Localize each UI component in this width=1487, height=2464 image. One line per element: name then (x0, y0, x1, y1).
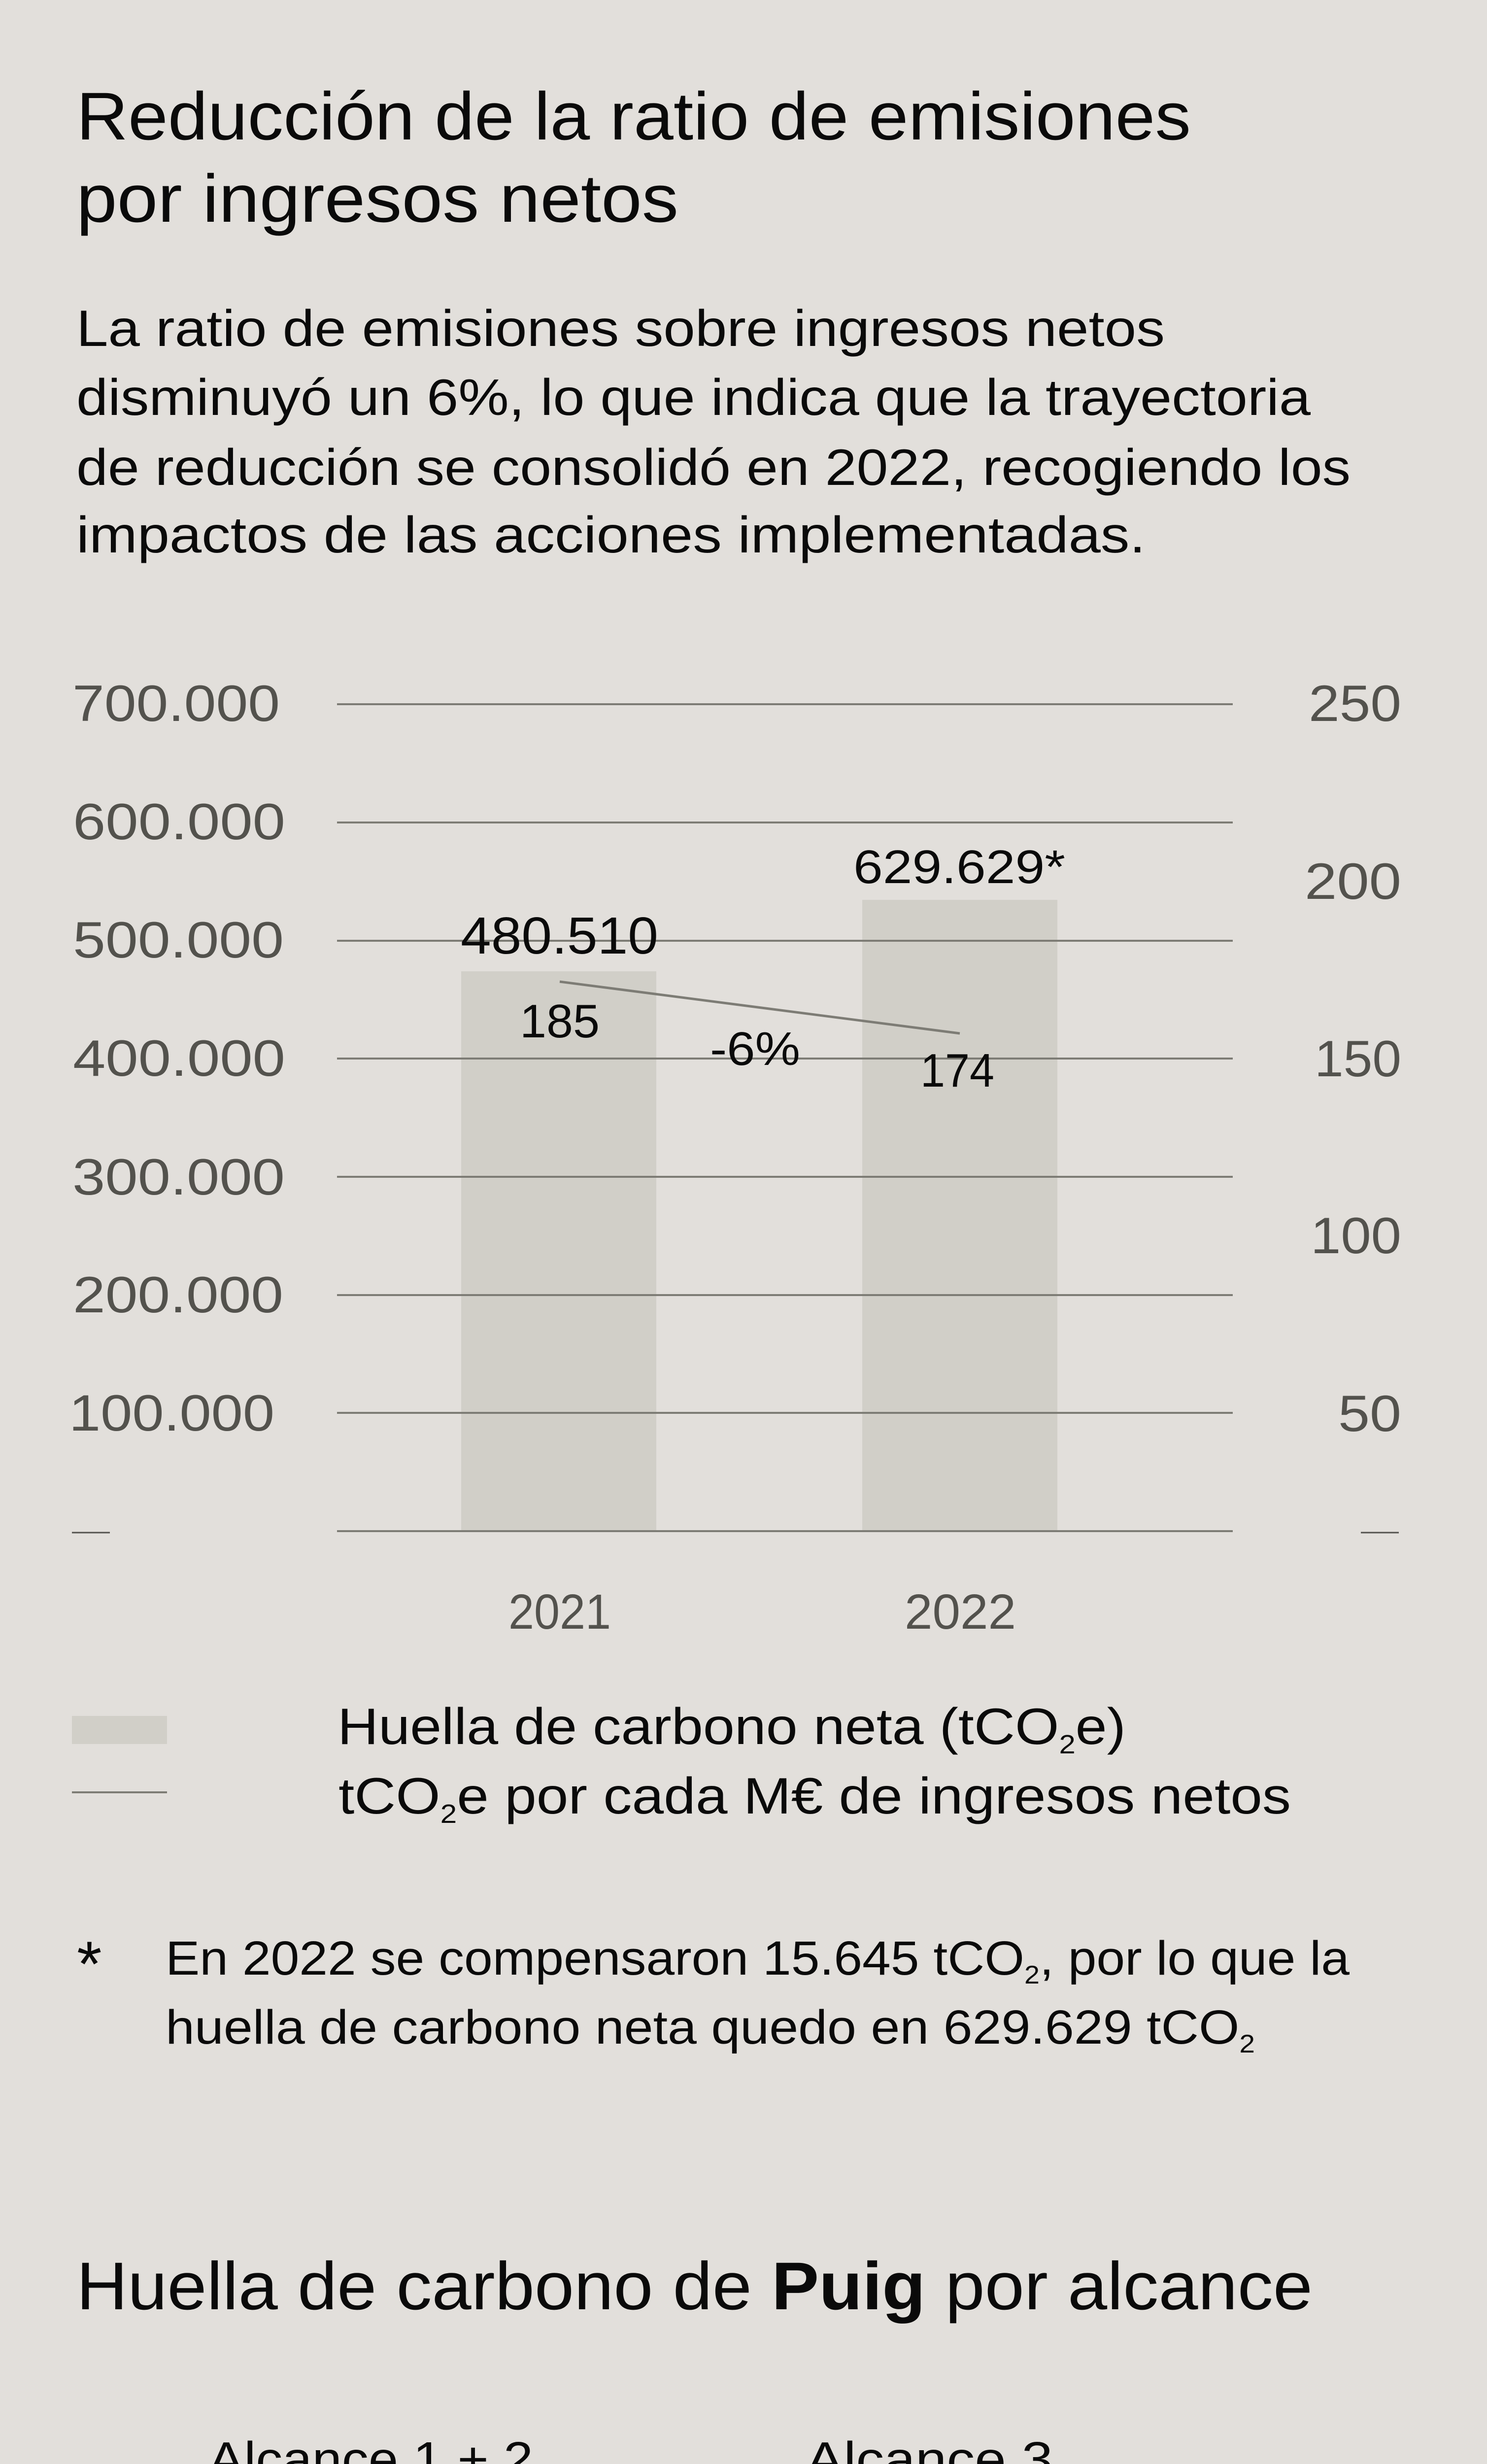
legend swatch: bar (72, 1716, 167, 1744)
footnote (77, 1928, 1350, 2058)
footnote: En 2022 se compensaron 15.645 tCO (166, 1931, 968, 1985)
x axis years: 2021 (508, 1584, 611, 1640)
x axis years: 2022 (905, 1584, 1016, 1640)
legend label: bar: Huella de carbono neta (tCO (338, 1698, 990, 1755)
combo chart: net carbon footprint and ratio (69, 675, 1401, 1640)
data labels: 629.629* (853, 841, 1065, 893)
data labels: 185 (520, 995, 600, 1048)
intro paragraph: impactos de las acciones implementadas. (76, 507, 1146, 564)
title: emissions ratio: Reducción de la ratio de emisiones (76, 79, 1191, 154)
intro paragraph: de reducción se consolidó en 2022, recogiendo los (76, 439, 1351, 496)
data labels (461, 841, 1065, 1097)
bars (461, 900, 1057, 1531)
intro paragraph: La ratio de emisiones sobre ingresos netos (76, 300, 1165, 357)
legend swatch: line (72, 1791, 167, 1793)
title: emissions ratio (76, 79, 1191, 237)
footnote: 2 (1024, 1961, 1040, 1989)
footnote: huella de carbono neta quedo en 629.629 tCO (166, 2000, 1149, 2054)
footnote: 2 (1239, 2030, 1255, 2058)
legend label: line: e por cada M€ de ingresos netos (457, 1768, 1291, 1825)
right axis labels: 200 (1305, 853, 1401, 910)
left axis labels: 500.000 (73, 912, 284, 969)
left axis labels: 200.000 (73, 1266, 283, 1324)
intro paragraph (76, 300, 1351, 564)
footnote: , por lo que la (1040, 1931, 1350, 1985)
data labels: 174 (920, 1044, 994, 1097)
data labels: 480.510 (461, 907, 658, 965)
right axis labels (1305, 675, 1401, 1442)
left axis labels: 100.000 (69, 1385, 274, 1442)
legend (72, 1698, 1291, 1829)
right axis labels: 50 (1338, 1385, 1401, 1442)
intro paragraph: disminuyó un 6%, lo que indica que la trayectoria (76, 369, 1311, 426)
left axis labels: 600.000 (73, 793, 285, 851)
title: emissions ratio: por ingresos netos (76, 161, 678, 237)
right axis labels: 250 (1309, 675, 1401, 732)
legend label: line: tCO (338, 1768, 430, 1825)
right axis labels: 100 (1311, 1207, 1401, 1265)
legend label: bar: e) (1076, 1698, 1126, 1755)
title: footprint by scope: Huella de carbono de Puig por alcance (76, 2249, 1313, 2324)
left axis labels: 400.000 (73, 1030, 285, 1087)
legend label: bar: 2 (1059, 1730, 1076, 1759)
footnote: * (77, 1928, 102, 2000)
right axis labels: 150 (1315, 1030, 1401, 1088)
legend label: line: 2 (440, 1799, 457, 1829)
left axis labels: 300.000 (72, 1149, 285, 1206)
left axis labels: 700.000 (72, 675, 280, 732)
x axis years (508, 1584, 1016, 1640)
ratio trend line (560, 982, 960, 1033)
data labels: -6% (710, 1023, 800, 1075)
left axis labels (69, 675, 285, 1442)
